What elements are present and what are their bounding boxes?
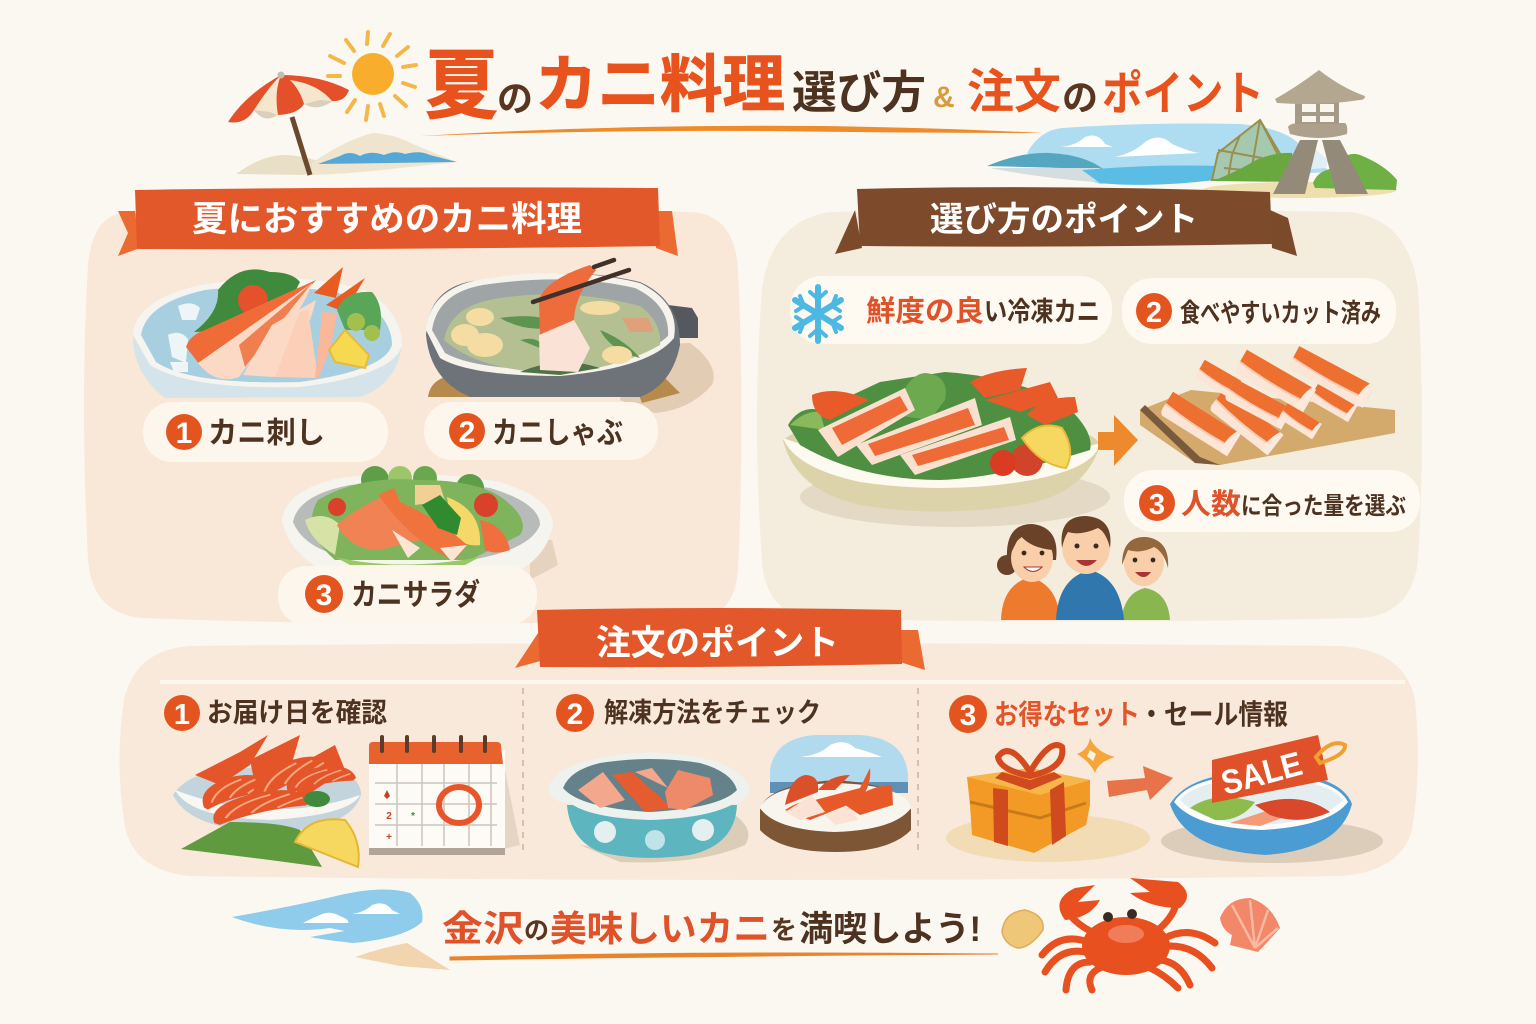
- footer message: の: [524, 917, 549, 945]
- item 3: portion size: 3: [1149, 489, 1165, 521]
- dish: cut crab on board: [1140, 346, 1395, 465]
- title: の: [497, 78, 533, 119]
- item 1: fresh frozen crab: い冷凍カニ: [984, 297, 1100, 327]
- icon: yellow shell: [1002, 910, 1043, 948]
- panel: recommended crab dishes: [84, 187, 742, 625]
- dish: kani shabu hot pot: [426, 260, 714, 413]
- title: 夏: [425, 44, 498, 129]
- dish: thawing bowl: [548, 752, 750, 862]
- title: 選び方: [792, 67, 926, 118]
- label: 2 kani shabu: [424, 402, 658, 460]
- dish: kani salad: [282, 466, 558, 580]
- footer message: 美味しいカニ: [550, 908, 770, 949]
- icon: calendar: 2: [386, 811, 392, 822]
- header illustration: Kanazawa sea and stone lantern: [987, 70, 1397, 198]
- heading ribbon: ordering tips: [515, 608, 925, 670]
- label: 3 kani salad: [278, 566, 537, 625]
- label: 3 kani salad: カニサラダ: [351, 578, 480, 612]
- icon: gift box: [946, 738, 1150, 862]
- tip 1: check delivery date: お届け日を確認: [207, 698, 387, 728]
- dish: bowl with sale tag: [1161, 735, 1383, 863]
- dish: crab salad bowl: [783, 368, 1110, 527]
- label: 1 kani sashimi: カニ刺し: [208, 417, 325, 450]
- title: [420, 44, 1264, 136]
- dish: bowl with sale tag: SALE: [1217, 745, 1306, 803]
- item 2: pre-cut: 2: [1146, 297, 1162, 329]
- heading ribbon: recommended dishes: 夏におすすめのカニ料理: [192, 200, 582, 239]
- heading ribbon: recommended dishes: [118, 187, 678, 256]
- icon: crab: [1042, 878, 1215, 990]
- icon: scallop shell: [1220, 898, 1280, 952]
- icon: calendar: +: [386, 832, 392, 843]
- label: 1 kani sashimi: [143, 402, 388, 462]
- title: の: [1062, 77, 1098, 118]
- panel: how to choose: [757, 187, 1422, 622]
- panel: ordering tips: [120, 608, 1418, 880]
- footer message: 金沢: [442, 908, 524, 949]
- footer message: を: [771, 915, 797, 945]
- heading ribbon: ordering tips: 注文のポイント: [596, 624, 839, 663]
- item 2: pre-cut: 食べやすいカット済み: [1180, 298, 1381, 328]
- title: ポイント: [1102, 67, 1264, 120]
- label: 1 kani sashimi: 1: [176, 417, 192, 450]
- item 3: portion size: 人数: [1181, 488, 1241, 521]
- title: &: [933, 81, 955, 114]
- tip 3: deals and sale info: お得なセット: [994, 699, 1140, 730]
- heading ribbon: how to choose: [835, 187, 1297, 256]
- icon: calendar: *: [411, 811, 415, 822]
- tip 2: check thawing method: 2: [567, 698, 583, 731]
- arrow: gift to sale: [1107, 766, 1173, 800]
- tip 1: check delivery date: 1: [174, 699, 190, 731]
- icon: sparkle: [1077, 738, 1115, 773]
- tip 1: check delivery date: [164, 695, 520, 867]
- icon: snowflake: [795, 287, 841, 341]
- item 2: pre-cut: [1122, 278, 1396, 344]
- title: カニ料理: [535, 51, 785, 120]
- header illustration: beach umbrella and sun: [228, 32, 457, 175]
- item 3: portion size: [1124, 470, 1420, 532]
- item 1: fresh frozen crab: 鮮度の良: [866, 295, 984, 328]
- item 3: portion size: に合った量を選ぶ: [1241, 493, 1406, 520]
- footer illustration: sky and sand: [232, 889, 450, 970]
- tip 3: deals and sale info: [946, 695, 1383, 863]
- tip 2: check thawing method: [548, 694, 911, 862]
- title: 注文: [967, 65, 1061, 118]
- item 1: fresh frozen crab: [790, 276, 1112, 344]
- footer message: [442, 908, 998, 960]
- label: 2 kani shabu: 2: [459, 416, 475, 449]
- label: 2 kani shabu: カニしゃぶ: [492, 417, 623, 450]
- label: 3 kani salad: 3: [316, 579, 332, 612]
- dish: crab on wooden plate with sea view: [760, 735, 911, 852]
- heading ribbon: how to choose: 選び方のポイント: [930, 201, 1198, 239]
- footer message: 満喫しよう!: [799, 910, 981, 949]
- arrow: to pre-cut crab: [1098, 415, 1138, 466]
- icon: calendar: [369, 737, 520, 855]
- tip 3: deals and sale info: ・セール情報: [1139, 699, 1288, 730]
- dish: crab legs with lemon: [173, 735, 361, 867]
- dish: kani sashimi plate: [133, 267, 402, 398]
- tip 3: deals and sale info: 3: [960, 699, 976, 732]
- illustration: family: [997, 516, 1170, 620]
- tip 2: check thawing method: 解凍方法をチェック: [604, 698, 821, 728]
